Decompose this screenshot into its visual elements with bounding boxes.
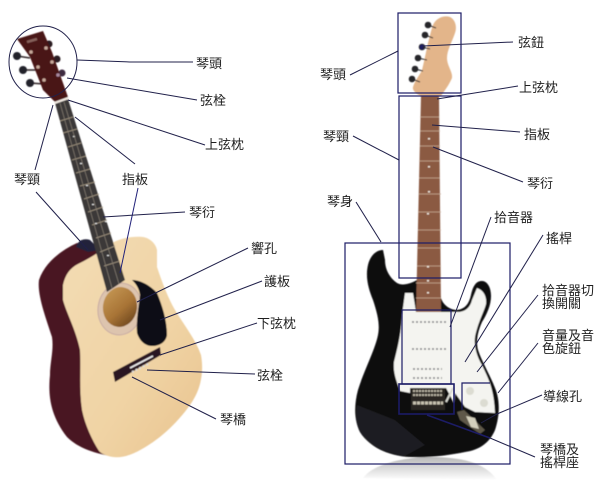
labels: electric guitar: 拾音器切 <box>542 283 594 298</box>
labels: electric guitar: 搖桿座 <box>540 455 579 470</box>
headstock logo <box>27 39 37 42</box>
labels: electric guitar: 音量及音 <box>542 328 594 343</box>
frets <box>416 117 441 298</box>
acoustic body top <box>63 237 202 457</box>
right frames <box>345 13 510 464</box>
headstock <box>17 31 68 102</box>
labels: electric guitar: 拾音器 <box>494 210 533 225</box>
pickguard <box>132 280 167 346</box>
acoustic guitar <box>13 31 202 457</box>
labels: acoustic guitar: 琴橋 <box>220 412 246 427</box>
body reflection <box>363 457 497 480</box>
nut <box>54 97 69 104</box>
labels: electric guitar: 色旋鈕 <box>542 341 581 356</box>
labels: electric guitar: 搖桿 <box>546 231 572 246</box>
peg posts <box>29 46 60 82</box>
left leader lines <box>9 26 262 419</box>
labels: acoustic guitar <box>14 56 296 427</box>
labels: electric guitar: 上弦枕 <box>519 80 558 95</box>
headstock circle <box>9 26 77 98</box>
labels: acoustic guitar: 琴頸 <box>14 172 40 187</box>
acoustic body side <box>39 243 140 457</box>
labels: acoustic guitar: 琴衍 <box>189 205 215 220</box>
labels: acoustic guitar: 響孔 <box>251 241 277 256</box>
pickups <box>412 322 446 378</box>
headstock <box>413 16 456 96</box>
right leader lines <box>350 42 543 457</box>
output jack <box>457 410 485 434</box>
neck <box>55 99 125 292</box>
labels: electric guitar: 琴頸 <box>323 129 349 144</box>
tuning pegs <box>409 22 436 82</box>
labels: electric guitar: 弦鈕 <box>518 35 544 50</box>
neck <box>416 96 441 312</box>
body highlight <box>356 405 425 456</box>
sound hole <box>95 280 145 338</box>
labels: acoustic guitar: 琴頭 <box>196 56 222 71</box>
pickguard <box>394 288 495 413</box>
labels: acoustic guitar: 弦栓 <box>200 93 226 108</box>
labels: electric guitar: 琴身 <box>327 194 353 209</box>
electric guitar <box>355 16 499 480</box>
knobs <box>466 387 488 407</box>
fret markers <box>428 138 429 294</box>
labels: electric guitar: 導線孔 <box>543 389 582 404</box>
labels: electric guitar: 指板 <box>524 127 550 142</box>
bridge plate <box>411 388 453 410</box>
bridge <box>113 347 161 382</box>
tuning pegs <box>13 40 66 87</box>
frets <box>60 117 120 266</box>
labels: electric guitar: 琴衍 <box>527 176 553 191</box>
electric body <box>355 250 499 457</box>
labels: acoustic guitar: 護板 <box>264 274 290 289</box>
labels: acoustic guitar: 指板 <box>122 172 148 187</box>
labels: acoustic guitar: 下弦枕 <box>257 316 296 331</box>
fret markers <box>74 136 108 256</box>
labels: acoustic guitar: 上弦枕 <box>205 137 244 152</box>
labels: electric guitar: 琴橋及 <box>540 442 579 457</box>
labels: electric guitar <box>320 35 594 470</box>
labels: electric guitar: 換開關 <box>542 296 581 311</box>
labels: acoustic guitar: 弦栓 <box>257 368 283 383</box>
strings <box>60 102 119 288</box>
heel <box>76 239 100 252</box>
labels: electric guitar: 琴頭 <box>320 67 346 82</box>
